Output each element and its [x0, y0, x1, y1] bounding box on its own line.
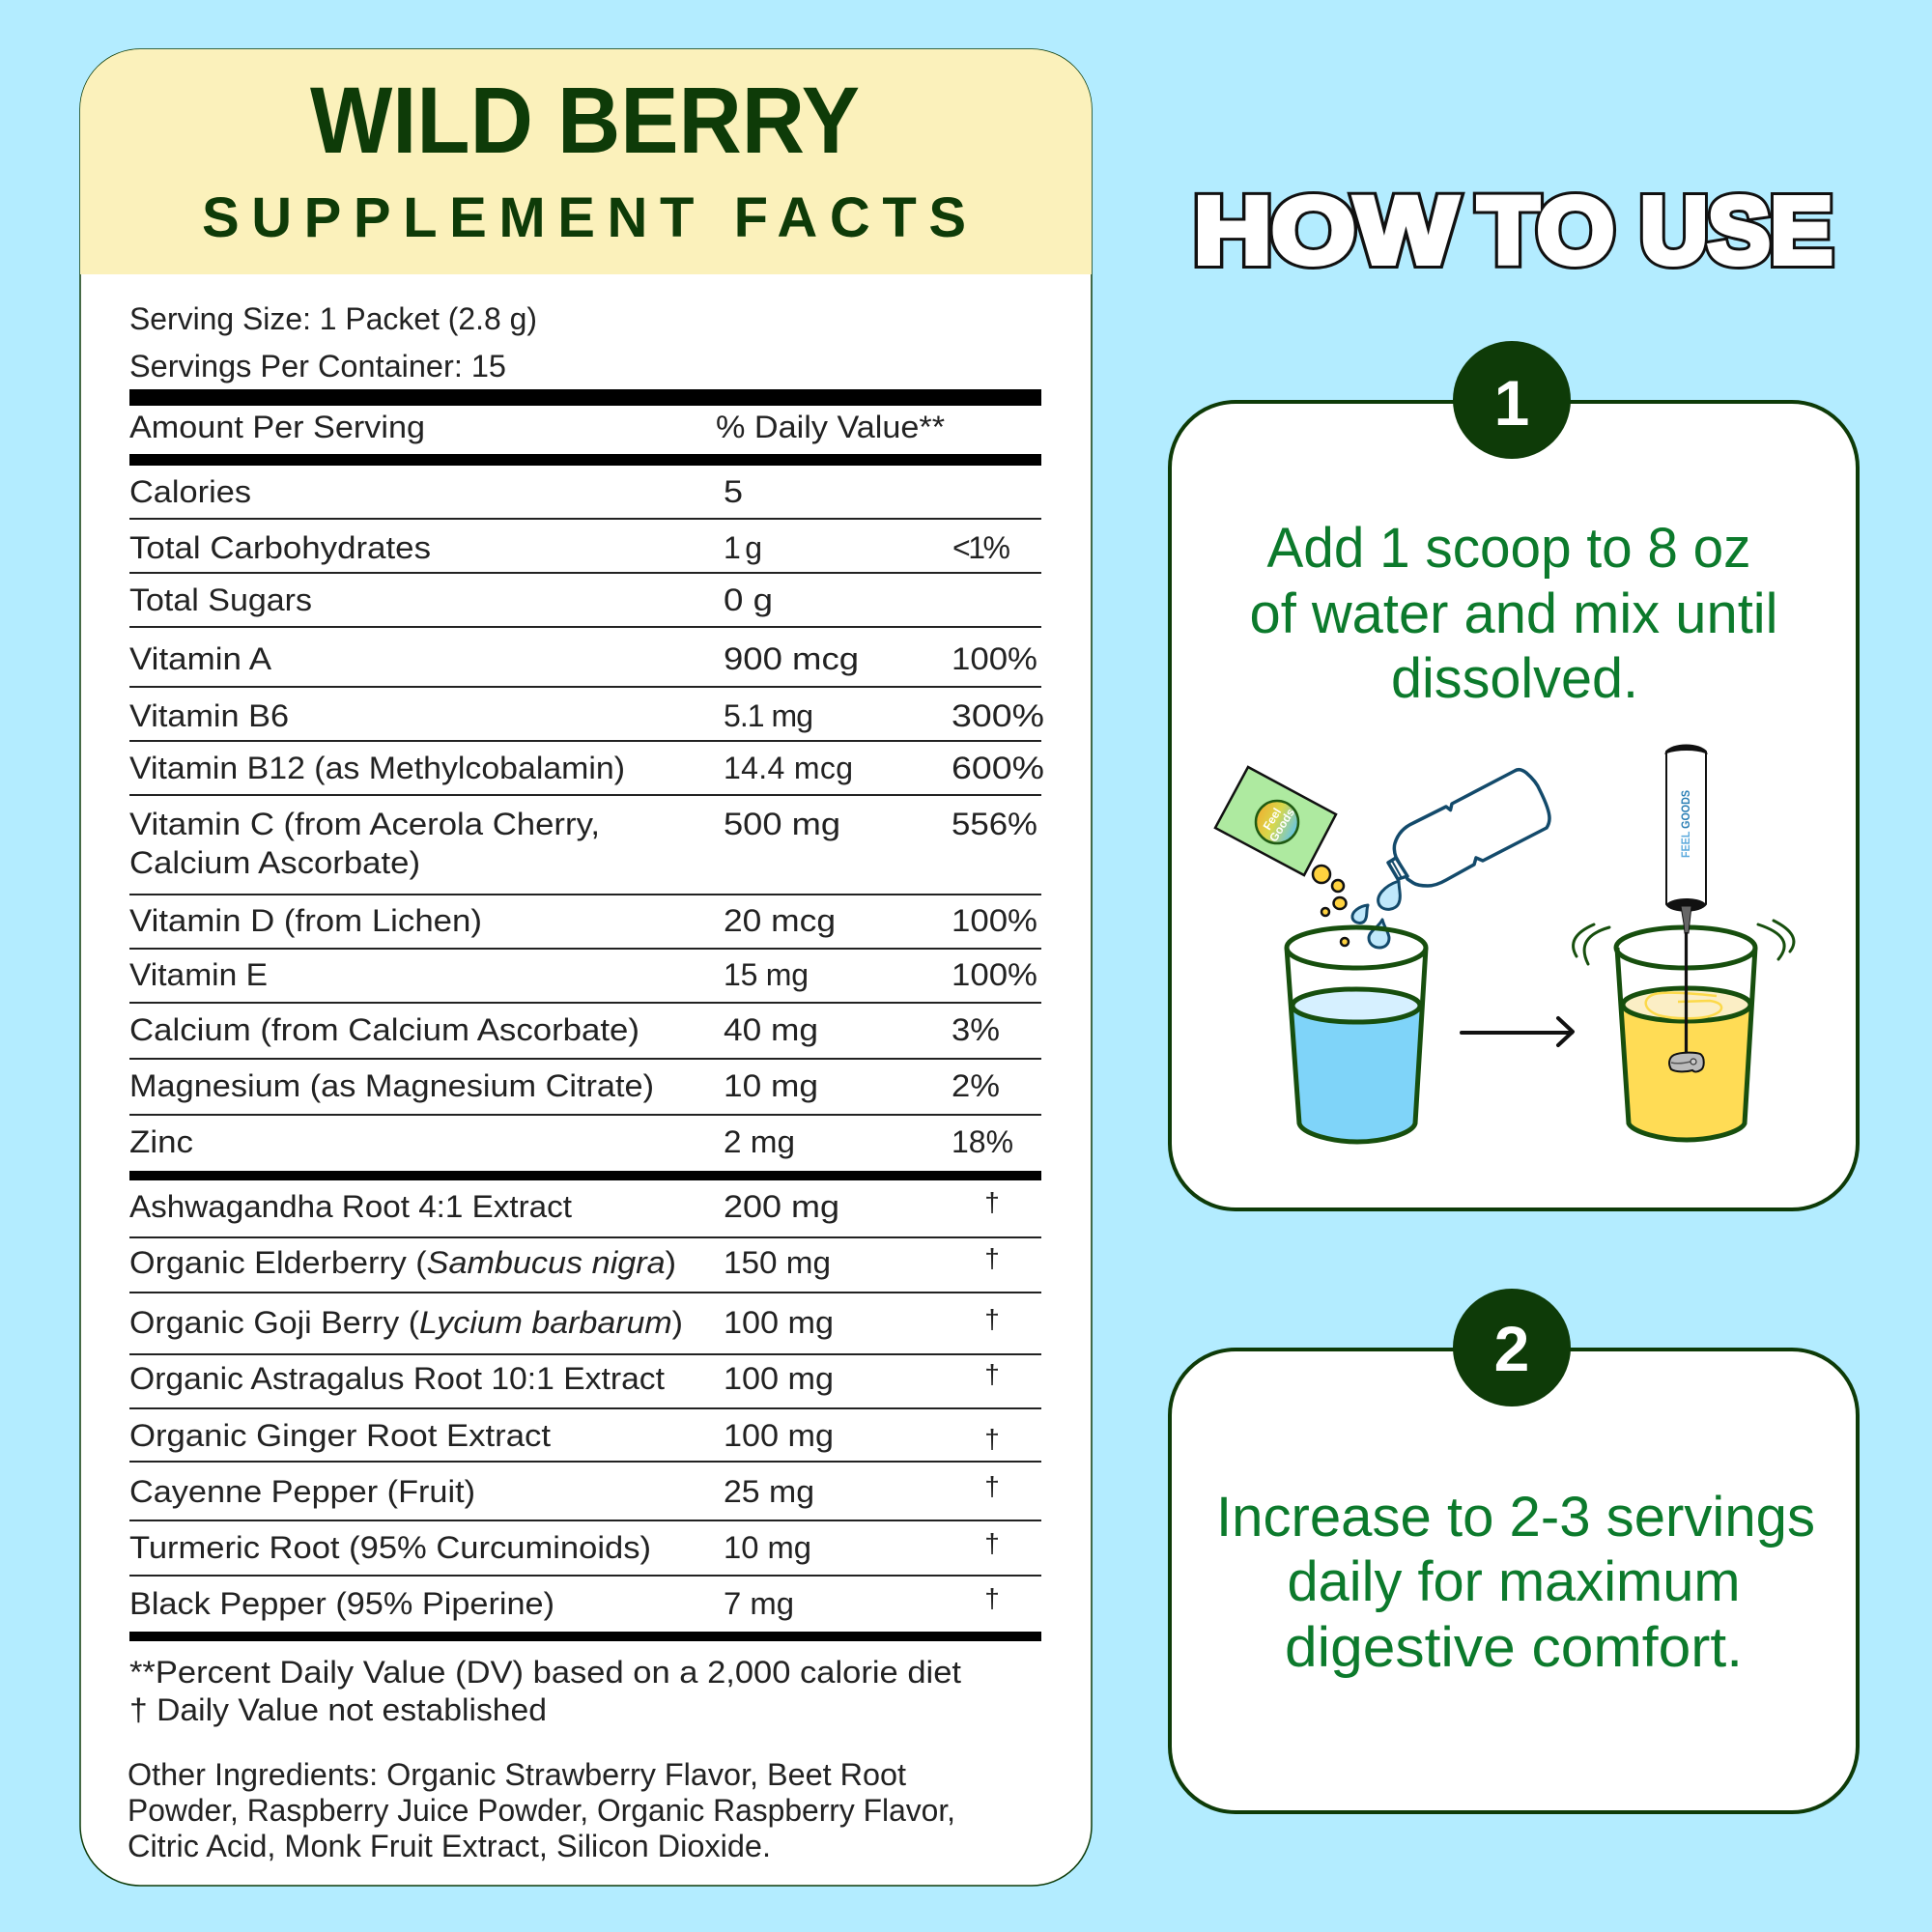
row: elderberry: † [984, 1243, 1000, 1273]
row: ashwagandha: 200 mg [724, 1189, 839, 1224]
row: zinc: 2 mg [724, 1124, 795, 1159]
step 1 instructions: dissolved. [1391, 647, 1638, 710]
icon: powder packet [1215, 767, 1336, 875]
row: elderberry: 150 mg [724, 1245, 831, 1280]
row: ashwagandha: † [984, 1187, 1000, 1217]
row: cayenne: † [984, 1471, 1000, 1501]
row: vitamin B6: 5.1 mg [724, 698, 813, 733]
row: magnesium [129, 1068, 1000, 1103]
row: calories: Calories [129, 474, 251, 509]
icon: milk frother: FEEL GOODS [1679, 790, 1692, 858]
step 1 instructions [1250, 517, 1777, 710]
row: vitamin D: 100% [952, 903, 1037, 938]
row: vitamin D: 20 mcg [724, 903, 836, 938]
other ingredients: Powder, Raspberry Juice Powder, Organic Raspberry Flavor, [128, 1793, 955, 1828]
step 2 instructions: Increase to 2-3 servings [1216, 1486, 1815, 1548]
heading: how to use: TO [1478, 178, 1614, 283]
serving information [129, 301, 537, 384]
row: ginger: † [984, 1424, 1000, 1454]
icon: powder packet: Feel [1261, 806, 1284, 833]
row: elderberry: Organic Elderberry ( Sambucus nigra ) [129, 1245, 676, 1280]
heading: how to use [1194, 178, 1833, 283]
row: magnesium: Magnesium (as Magnesium Citrate) [129, 1068, 654, 1103]
icon: powder packet: Goods [1266, 806, 1297, 844]
heading: how to use: HOW [1194, 178, 1458, 283]
row: total sugars [129, 582, 773, 617]
row: vitamin E: 100% [952, 957, 1037, 992]
heading: how to use: USE [1640, 178, 1833, 283]
row: elderberry [129, 1243, 1000, 1280]
row: vitamin B6: 300% [952, 698, 1044, 733]
icon: powder granules [1313, 866, 1349, 946]
row: calories [129, 474, 743, 509]
row: astragalus: Organic Astragalus Root 10:1 Extract [129, 1361, 665, 1396]
row: black pepper [129, 1583, 1000, 1621]
row: calcium [129, 1012, 1000, 1047]
row: astragalus [129, 1359, 1000, 1396]
heading: how to use: HOW [1194, 178, 1458, 283]
step 1 number badge: 1 [1494, 367, 1529, 439]
row: cayenne [129, 1471, 1000, 1509]
row: vitamin C: Vitamin C (from Acerola Cherry, [129, 807, 600, 841]
row: black pepper: Black Pepper (95% Piperine) [129, 1586, 554, 1621]
icon: milk frother [1666, 746, 1706, 1072]
step 1 number badge [1453, 341, 1571, 459]
row: ashwagandha: Ashwagandha Root 4:1 Extract [129, 1189, 572, 1224]
row: ashwagandha [129, 1187, 1000, 1224]
table header: Amount Per Serving [129, 410, 425, 444]
panel: supplement facts [80, 49, 1092, 1886]
row: black pepper: 7 mg [724, 1586, 794, 1621]
row: ginger: 100 mg [724, 1418, 834, 1453]
row: turmeric: 10 mg [724, 1530, 811, 1565]
icon: glass of water [1287, 927, 1426, 1142]
arrow [1462, 1018, 1573, 1045]
row: vitamin E: Vitamin E [129, 957, 268, 992]
row: magnesium: 10 mg [724, 1068, 818, 1103]
row: goji berry: 100 mg [724, 1305, 834, 1340]
panel: step 2 [1170, 1289, 1858, 1812]
step 2 instructions: daily for maximum [1287, 1550, 1741, 1613]
row dividers [129, 518, 1041, 1641]
row: vitamin B12: 14.4 mcg [724, 751, 853, 785]
row: vitamin B12: 600% [952, 751, 1044, 785]
row: vitamin B6: Vitamin B6 [129, 698, 289, 733]
table header [129, 410, 945, 444]
row: cayenne: Cayenne Pepper (Fruit) [129, 1474, 475, 1509]
row: vitamin A: 900 mcg [724, 641, 859, 676]
row: vitamin B12 [129, 751, 1044, 785]
row: vitamin B12: Vitamin B12 (as Methylcobalamin) [129, 751, 625, 785]
row: turmeric: Turmeric Root (95% Curcuminoids) [129, 1530, 651, 1565]
row: goji berry: Organic Goji Berry ( Lycium barbarum ) [129, 1305, 683, 1340]
row: vitamin C: 500 mg [724, 807, 840, 841]
step 2 instructions: digestive comfort. [1285, 1616, 1743, 1679]
row: vitamin E [129, 957, 1037, 992]
other ingredients: Other Ingredients: Organic Strawberry Flavor, Beet Root [128, 1757, 906, 1792]
footnotes [129, 1655, 961, 1727]
icon: water drops [1352, 881, 1400, 948]
footnotes: † Daily Value not established [129, 1692, 547, 1727]
step 1 instructions: Add 1 scoop to 8 oz [1267, 517, 1750, 580]
serving information: Servings Per Container: 15 [129, 349, 506, 384]
row: goji berry [129, 1304, 1000, 1340]
row: total carbohydrates: Total Carbohydrates [129, 530, 431, 565]
panel: step 1 [1170, 341, 1858, 1209]
row: vitamin D [129, 903, 1037, 938]
row: total carbohydrates: <1% [952, 530, 1010, 565]
icon: vibration marks [1574, 921, 1794, 964]
row: turmeric: † [984, 1528, 1000, 1558]
step 2 number badge: 2 [1494, 1313, 1529, 1384]
row: vitamin D: Vitamin D (from Lichen) [129, 903, 482, 938]
row: zinc: 18% [952, 1124, 1013, 1159]
row: calcium: 3% [952, 1012, 1000, 1047]
heading: wild berry: WILD BERRY [310, 68, 860, 173]
row: vitamin C: 556% [952, 807, 1037, 841]
row: astragalus: 100 mg [724, 1361, 834, 1396]
step 2 instructions [1216, 1486, 1815, 1679]
icon: glass of yellow drink [1616, 927, 1755, 1140]
row: calcium: 40 mg [724, 1012, 818, 1047]
row: vitamin A: 100% [952, 641, 1037, 676]
row: ginger [129, 1418, 1000, 1454]
row: vitamin C: Calcium Ascorbate) [129, 845, 420, 880]
row: black pepper: † [984, 1583, 1000, 1613]
step 2 number badge [1453, 1289, 1571, 1406]
other ingredients: Citric Acid, Monk Fruit Extract, Silicon Dioxide. [128, 1829, 771, 1863]
row: vitamin B6 [129, 698, 1044, 733]
row: zinc: Zinc [129, 1124, 193, 1159]
row: total sugars: Total Sugars [129, 582, 312, 617]
row: calcium: Calcium (from Calcium Ascorbate) [129, 1012, 639, 1047]
row: turmeric [129, 1528, 1000, 1565]
panel header background [80, 49, 1092, 274]
row: vitamin A: Vitamin A [129, 641, 272, 676]
row: astragalus: † [984, 1359, 1000, 1389]
row: vitamin E: 15 mg [724, 957, 809, 992]
row: calories: 5 [724, 474, 743, 509]
row: magnesium: 2% [952, 1068, 1000, 1103]
footnotes: **Percent Daily Value (DV) based on a 2,000 calorie diet [129, 1655, 961, 1690]
table header: % Daily Value** [716, 410, 945, 444]
row: zinc [129, 1124, 1013, 1159]
heading: how to use: USE [1640, 178, 1833, 283]
row: vitamin C [129, 807, 1037, 880]
row: cayenne: 25 mg [724, 1474, 814, 1509]
row: total sugars: 0 g [724, 582, 773, 617]
serving information: Serving Size: 1 Packet (2.8 g) [129, 301, 537, 336]
row: goji berry: † [984, 1304, 1000, 1334]
icon: water bottle [1388, 770, 1549, 886]
row: total carbohydrates [129, 530, 1010, 565]
row: total carbohydrates: 1 g [724, 530, 762, 565]
row: vitamin A [129, 641, 1037, 676]
step 1 instructions: of water and mix until [1250, 582, 1777, 645]
row: ginger: Organic Ginger Root Extract [129, 1418, 551, 1453]
heading: supplement facts: SUPPLEMENT FACTS [202, 186, 966, 249]
other ingredients [128, 1757, 955, 1863]
heading: how to use: TO [1478, 178, 1614, 283]
